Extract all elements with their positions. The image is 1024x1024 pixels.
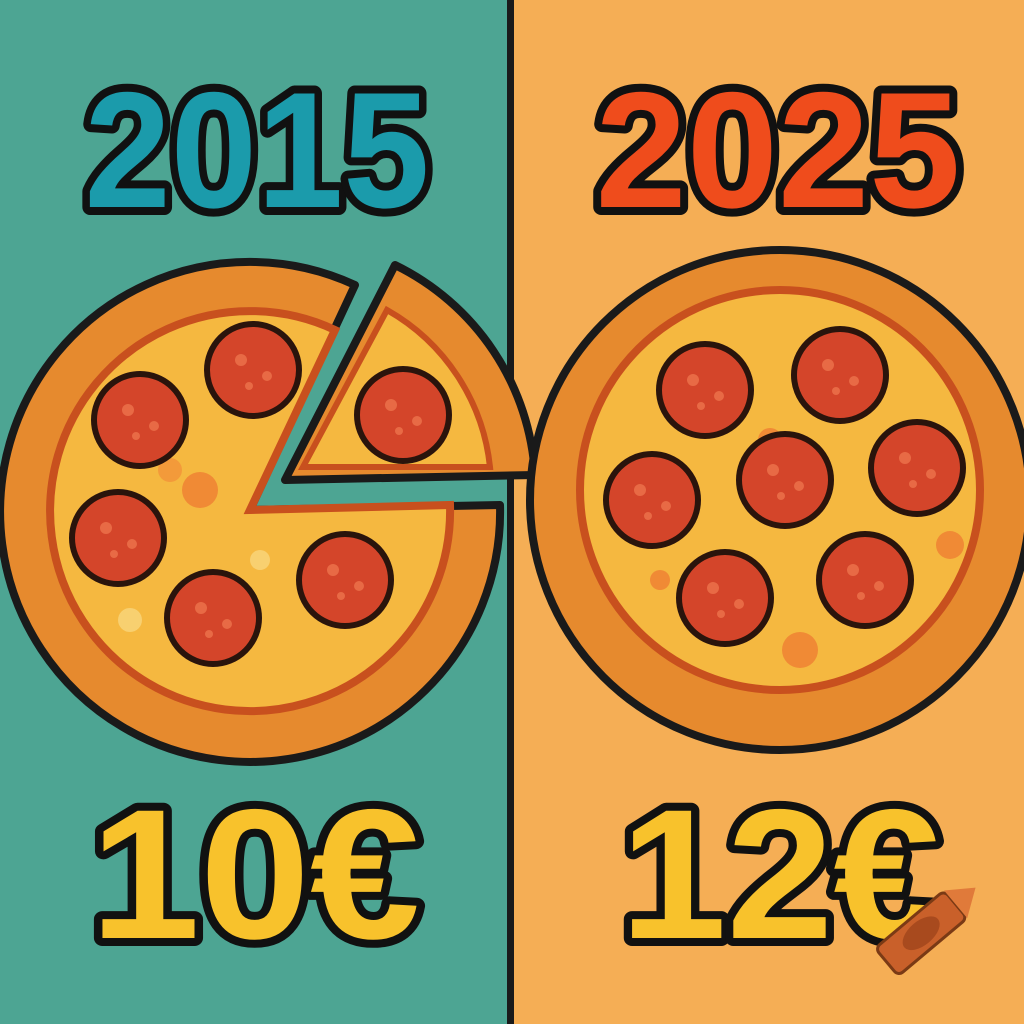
title: 2015: 2015: [84, 58, 430, 242]
price: 12€: 12€: [620, 772, 940, 978]
icon: crayon: [875, 874, 987, 976]
price: 10€: 10€: [90, 772, 420, 978]
pizza slice: [285, 265, 535, 480]
pizza 2025 whole: [530, 250, 1024, 750]
title: 2025: 2025: [596, 58, 960, 242]
panel: left 2015 background: [0, 0, 510, 1024]
pizza 2015 with missing slice: [0, 262, 500, 762]
panel: right 2025 background: [512, 0, 1024, 1024]
